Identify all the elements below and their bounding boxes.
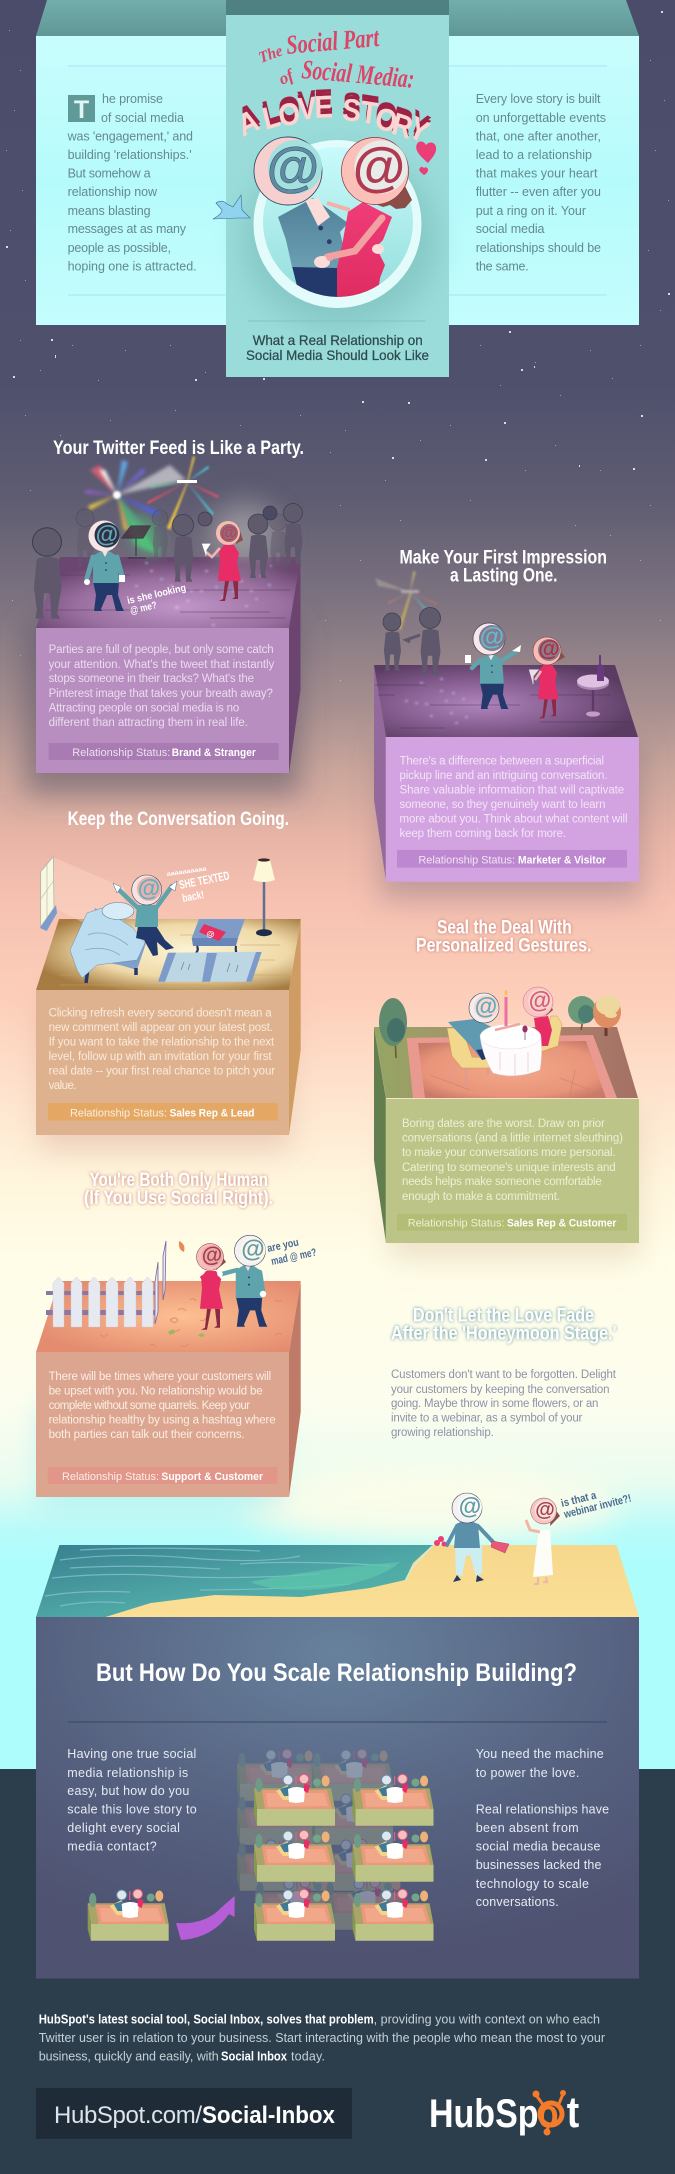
top flap [36, 0, 639, 36]
quarrel copy: complete without some quarrels. Keep your [49, 1400, 250, 1412]
right copy: conversations. [476, 1895, 559, 1909]
panel: dinner [374, 987, 639, 1243]
intro text right: that makes your heart [476, 167, 598, 181]
heading: seal the deal [416, 918, 592, 956]
conversation copy: Clicking refresh every second doesn't mean a [49, 1008, 272, 1020]
coffee table [192, 919, 245, 956]
speech text: are you [266, 1237, 300, 1255]
subtitle: What a Real Relationship on [253, 332, 423, 348]
right copy: to power the love. [476, 1766, 579, 1780]
intro text left: hoping one is attracted. [68, 260, 197, 274]
title script: The [257, 43, 285, 67]
intro text left: relationship now [68, 185, 158, 199]
intro text right: flutter -- even after you [476, 185, 601, 199]
floor light dots [405, 678, 468, 724]
heading: first impression: Make Your First Impression [400, 548, 607, 568]
left copy: media contact? [67, 1840, 157, 1854]
figure: woman: @ [202, 1244, 222, 1267]
shoreline foam [405, 1546, 432, 1581]
intro text left: means blasting [68, 204, 151, 218]
intro text right: social media [476, 222, 545, 236]
quarrel copy: be upset with you. No relationship would be [49, 1386, 263, 1398]
honeymoon copy: going. Maybe throw in some flowers, or an [391, 1398, 598, 1410]
figure: excited man [113, 875, 177, 956]
panel: first impression [374, 571, 639, 882]
scattered leaves [100, 1289, 282, 1347]
party copy: your attention. What's the tweet that instantly [49, 659, 275, 671]
figure: excited man: @ [138, 875, 160, 901]
intro text left: building 'relationships.' [68, 148, 192, 162]
panel: quarrel [36, 1235, 318, 1497]
title script: Social Media: [300, 54, 416, 94]
relationship status: Relationship Status: [418, 854, 515, 866]
figure: woman at party [202, 521, 243, 601]
relationship status: Relationship Status: [72, 747, 170, 759]
head: woman [523, 987, 553, 1017]
table and wine bottle [577, 655, 609, 717]
party copy [49, 644, 275, 729]
right copy: You need the machine [476, 1747, 604, 1761]
intro text left [67, 92, 197, 274]
head: man [254, 137, 322, 205]
subtitle [246, 332, 429, 363]
speech text: aaaaaaaaaa [166, 866, 208, 878]
footer copy: today. [291, 2050, 325, 2064]
speech text [126, 583, 187, 617]
dinner copy: Boring dates are the worst. Draw on prior [402, 1118, 605, 1130]
party copy: different than attracting them in real life. [49, 717, 248, 729]
figure: woman [196, 1244, 226, 1330]
right copy: Real relationships have [476, 1803, 609, 1817]
window and light beam [40, 857, 125, 942]
visitor copy: There's a difference between a superficial [400, 756, 604, 768]
party copy: Pinterest image that takes your breath away? [49, 688, 273, 700]
subtitle rule [248, 320, 425, 322]
footer copy: Twitter user is in relation to your business. Start interacting with the people who mean the most to your [39, 2031, 605, 2045]
icon: sprocket [532, 2090, 566, 2136]
speech text: SHE TEXTED [178, 868, 231, 892]
man pants [292, 266, 338, 300]
heading: But How Do You Scale Relationship Building? [96, 1659, 577, 1687]
conversation copy: level, follow up with an invitation for your first [49, 1051, 272, 1063]
speech text: is that a [560, 1489, 598, 1510]
intro text right: on unforgettable events [476, 111, 606, 125]
couple illustration [254, 137, 412, 300]
figure: woman at party: @ [221, 523, 237, 542]
background silhouettes [76, 509, 286, 568]
floor lamp [253, 858, 275, 936]
dinner copy: Catering to someone's unique interests and [402, 1162, 616, 1174]
box front [386, 737, 639, 882]
panel: center title column [213, 0, 449, 377]
box side [374, 665, 386, 881]
panel: party [32, 456, 302, 773]
figure: woman in white [526, 1498, 560, 1584]
intro text right: put a ring on it. Your [476, 204, 586, 218]
relationship status: Sales Rep & Lead [170, 1107, 254, 1119]
relationship status: Marketer & Visitor [518, 854, 607, 866]
panel: conversation [36, 857, 301, 1135]
card background [36, 36, 639, 325]
portrait disc [254, 140, 422, 308]
heading: honeymoon [391, 1306, 616, 1344]
conversation copy: new comment will appear on your latest post. [49, 1022, 273, 1034]
heading: honeymoon: After the 'Honeymoon Stage.' [391, 1324, 616, 1344]
relationship status [397, 850, 627, 868]
silhouettes [383, 608, 440, 675]
intro text left: people as possible, [68, 241, 171, 255]
midground silhouettes [172, 504, 302, 582]
title script: of [276, 65, 298, 89]
call to action box [36, 2088, 352, 2139]
figure: man with drink [465, 623, 521, 709]
quarrel copy: relationship healthy by using a hashtag where [49, 1415, 276, 1427]
visitor copy [400, 756, 628, 840]
head: man [469, 993, 499, 1023]
relationship status: Relationship Status: [62, 1471, 159, 1483]
speech text: is she looking [126, 583, 187, 607]
right copy: social media because [476, 1840, 601, 1854]
disco lights [85, 456, 280, 567]
left copy [67, 1747, 197, 1854]
starfield [6, 11, 670, 681]
visitor copy: Share valuable information that will captivate [400, 784, 624, 796]
center panel [226, 15, 449, 377]
head: woman: @ [353, 137, 405, 197]
title script: Social Part [285, 22, 381, 60]
heading: only human: You're Both Only Human [90, 1170, 268, 1191]
speech text [266, 1237, 318, 1268]
head: man: @ [267, 137, 319, 197]
footer copy: , providing you with context on who each [374, 2012, 600, 2026]
icon: bluebird [213, 195, 250, 219]
intro text right: Every love story is built [476, 92, 601, 106]
heading: only human [84, 1170, 273, 1209]
intro text right: the same. [476, 260, 529, 274]
fence [46, 1241, 166, 1327]
dinner table [480, 990, 542, 1076]
heading: seal the deal: Seal the Deal With [437, 918, 572, 938]
visitor floor [374, 665, 638, 737]
relationship status [48, 1467, 277, 1484]
party copy: Parties are full of people, but only some catch [49, 644, 274, 656]
heading: first impression: a Lasting One. [450, 566, 558, 586]
figure: man at party [84, 520, 125, 611]
heading: seal the deal: Personalized Gestures. [416, 936, 592, 956]
head: man: @ [475, 993, 497, 1019]
speech text: webinar invite?! [562, 1493, 633, 1521]
figure: man [217, 1235, 267, 1327]
footer copy: business, quickly and easily, with [39, 2050, 219, 2064]
figure: woman with wine: @ [538, 636, 560, 661]
dinner copy: conversations (and a little internet sleuthing) [402, 1133, 623, 1145]
dinner copy: enough to make a commitment. [402, 1191, 560, 1203]
figure: man: @ [241, 1236, 265, 1263]
right copy: businesses lacked the [476, 1858, 601, 1872]
intro text left: But somehow a [68, 167, 151, 181]
dinner copy: needs helps make someone comfortable [402, 1176, 602, 1188]
visitor copy: pickup line and an intriguing conversation. [400, 770, 608, 782]
relationship status [397, 1214, 627, 1231]
heading: honeymoon: Don't Let the Love Fade [413, 1306, 594, 1326]
left copy: delight every social [67, 1821, 180, 1835]
beach scene [36, 1489, 639, 1617]
woman dress [337, 202, 392, 300]
intro text right [476, 92, 606, 274]
drop cap T [68, 95, 95, 124]
dirt floor [36, 1281, 301, 1352]
speech text [166, 866, 231, 905]
head: woman [342, 137, 408, 204]
head: woman: @ [529, 987, 551, 1013]
arrow [176, 1896, 235, 1940]
panel shadows [25, 620, 642, 1510]
relationship status [48, 1103, 278, 1121]
speech text: back! [181, 889, 205, 905]
box front [386, 1099, 639, 1243]
box side [289, 557, 300, 773]
center flap [226, 0, 449, 15]
relationship status: Relationship Status: [70, 1107, 167, 1119]
sand [36, 1545, 639, 1617]
sea [36, 1545, 433, 1617]
heading: only human: (If You Use Social Right). [84, 1188, 273, 1209]
left copy: Having one true social [67, 1747, 196, 1761]
quarrel copy [49, 1371, 276, 1441]
icon: hearts [416, 141, 436, 175]
single dinner scene [88, 1889, 169, 1941]
bar table [122, 526, 150, 558]
portrait inner disc [263, 147, 413, 297]
box front [36, 990, 289, 1135]
relationship status [49, 743, 279, 760]
woman hair [373, 186, 412, 209]
title: A LOVE STORY: A LOVE STORY [233, 90, 434, 151]
quarrel copy: both parties can talk out their concerns. [49, 1429, 245, 1441]
conversation copy: real date -- your first real chance to pitch your [49, 1066, 275, 1078]
figure: man with drink: @ [480, 623, 504, 651]
figure: woman in white: @ [535, 1499, 555, 1521]
relationship status: Relationship Status: [408, 1217, 504, 1229]
intro text left: was 'engagement,' and [67, 130, 193, 144]
panel: intro card [36, 0, 639, 325]
left copy: scale this love story to [67, 1803, 197, 1817]
title script [257, 22, 416, 94]
relationship status: Brand & Stranger [172, 747, 256, 759]
logo: HubSpot: o [538, 2090, 559, 2136]
logo: HubSpot: t [567, 2087, 580, 2137]
box front [36, 628, 289, 773]
light flare [375, 571, 437, 630]
man shirt [278, 198, 348, 268]
garden floor [374, 1027, 638, 1098]
left copy: easy, but how do you [67, 1784, 189, 1798]
subtitle: Social Media Should Look Like [246, 347, 429, 363]
box side [289, 919, 301, 1135]
bedroom floor [36, 919, 301, 990]
drop cap T: T [74, 96, 89, 124]
logo: HubSpot: HubSp [429, 2090, 539, 2136]
dinner copy: to make your conversations more personal. [402, 1147, 616, 1159]
ghost dinner scenes [237, 1749, 406, 1930]
dark footer background [0, 1769, 675, 2174]
conversation copy [49, 1008, 275, 1092]
floor light dots [135, 570, 263, 626]
intro text right: relationships should be [476, 241, 601, 255]
heading: keep the conversation: Keep the Conversation Going. [68, 809, 289, 830]
figure: man with flowers [434, 1493, 509, 1582]
party floor [36, 557, 300, 628]
panel: scaling relationships [36, 1617, 639, 1978]
relationship status: Support & Customer [161, 1471, 264, 1483]
chair and woman [534, 1016, 562, 1057]
figure: man with flowers: @ [459, 1493, 481, 1519]
honeymoon copy: your customers by keeping the conversation [391, 1384, 610, 1396]
cream glow behind beach figures [240, 1467, 620, 1543]
foreground silhouette [32, 528, 62, 619]
logo: HubSpot [429, 2087, 580, 2137]
figure: woman with wine [529, 636, 565, 718]
call to action box: Social-Inbox [202, 2102, 336, 2129]
waves [45, 1548, 390, 1606]
call to action box: HubSpot.com/ [54, 2102, 202, 2129]
terrace [407, 1035, 617, 1098]
box side [289, 1281, 301, 1497]
bed [70, 902, 146, 983]
tree left [379, 998, 407, 1058]
conversation copy: value. [49, 1080, 77, 1092]
trees right [568, 995, 621, 1036]
dinner copy [402, 1118, 623, 1203]
box front [36, 1352, 289, 1497]
honeymoon copy [391, 1369, 617, 1439]
coffee table: @ [205, 929, 216, 940]
icon: flowers [434, 1536, 446, 1546]
honeymoon copy: growing relationship. [391, 1427, 494, 1439]
chair and man [447, 1019, 498, 1085]
honeymoon copy: invite to a webinar, as a symbol of your [391, 1413, 583, 1425]
right copy: been absent from [476, 1821, 579, 1835]
heading: first impression [400, 548, 607, 586]
visitor copy: keep them coming back for more. [400, 828, 566, 840]
party copy: Attracting people on social media is no [49, 702, 239, 714]
visitor copy: someone, so they genuinely want to learn [400, 799, 606, 811]
speech text: @ me? [129, 600, 158, 617]
figure: man at party: @ [96, 521, 118, 547]
footer copy [39, 2012, 605, 2064]
quarrel copy: There will be times where your customers will [49, 1371, 271, 1383]
icon: falling leaf [179, 1241, 184, 1252]
honeymoon copy: Customers don't want to be forgotten. Delight [391, 1369, 617, 1381]
intro text right: that, one after another, [476, 130, 601, 144]
left copy: media relationship is [67, 1766, 188, 1780]
intro text right: lead to a relationship [476, 148, 592, 162]
speech text: mad @ me? [270, 1247, 318, 1268]
party copy: stops someone in their tracks? What's the [49, 673, 254, 685]
footer copy: Social Inbox [221, 2050, 287, 2064]
grid of dinner scenes [254, 1774, 434, 1941]
visitor copy: more about you. Think about what content will [400, 814, 628, 826]
conversation copy: If you want to take the relationship to the next [49, 1037, 275, 1049]
intro text left: he promise [102, 92, 163, 106]
intro text left: messages at as many [68, 222, 187, 236]
box side [374, 1027, 386, 1243]
heading: party: Your Twitter Feed is Like a Party. [53, 438, 304, 459]
right copy [476, 1747, 609, 1909]
intro text left: of social media [101, 111, 184, 125]
right copy: technology to scale [476, 1877, 589, 1891]
footer copy: HubSpot's latest social tool, Social Inbox, solves that problem [39, 2012, 374, 2026]
icon: webinar invite [491, 1541, 509, 1553]
rug [158, 952, 262, 982]
relationship status: Sales Rep & Customer [507, 1217, 617, 1229]
